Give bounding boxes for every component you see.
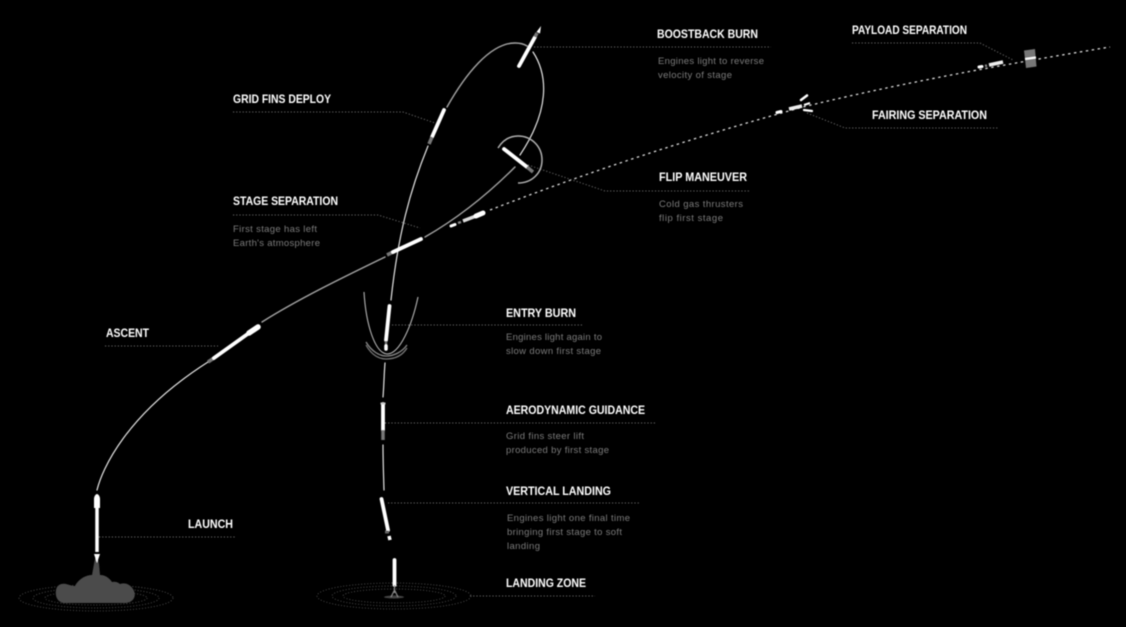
label: entry burn [506, 306, 602, 357]
label: payload separation: PAYLOAD SEPARATION [852, 23, 967, 37]
rocket: boostback burn [519, 26, 541, 66]
label: aerodynamic guidance: Grid fins steer lift [506, 431, 584, 442]
leader lines [99, 43, 1013, 596]
return arc [520, 52, 544, 155]
label: launch: LAUNCH [188, 517, 233, 531]
label: entry burn: ENTRY BURN [506, 306, 576, 320]
label: vertical landing [506, 484, 630, 552]
rocket: flip maneuver [504, 149, 533, 172]
label: aerodynamic guidance: AERODYNAMIC GUIDANCE [506, 403, 645, 417]
flip maneuver arc [498, 136, 542, 183]
coast descent arc [391, 146, 428, 300]
ascent trajectory [97, 362, 208, 490]
label: stage separation: First stage has left [233, 224, 317, 235]
label: entry burn: Engines light again to [506, 332, 602, 343]
satellite payload [1024, 49, 1036, 68]
rocket: launch [94, 494, 100, 563]
label: flip maneuver: Cold gas thrusters [659, 199, 743, 210]
label: stage separation: STAGE SEPARATION [233, 194, 338, 208]
launch pad rings [19, 585, 173, 611]
label: vertical landing: bringing first stage to soft [507, 527, 622, 538]
descent line to landing burn [383, 445, 384, 490]
label: stage separation [233, 194, 338, 249]
rocket: vertical landing [382, 499, 390, 540]
label: grid fins deploy: GRID FINS DEPLOY [233, 92, 331, 106]
label: entry burn: slow down first stage [506, 346, 601, 357]
rocket: stage separation [387, 239, 421, 255]
boostback arc [447, 43, 527, 107]
label: boostback burn: BOOSTBACK BURN [657, 27, 758, 41]
label: boostback burn: Engines light to reverse [658, 56, 764, 67]
rocket: fairing separation [777, 96, 812, 112]
label: boostback burn: velocity of stage [658, 70, 732, 81]
label: flip maneuver [659, 170, 747, 224]
label: flip maneuver: FLIP MANEUVER [659, 170, 747, 184]
rocket: upper stage at payload separation [979, 62, 1003, 67]
exhaust cloud [56, 556, 135, 603]
label: flip maneuver: flip first stage [659, 213, 723, 224]
label: boostback burn [657, 27, 764, 81]
label: vertical landing: landing [507, 541, 540, 552]
label: aerodynamic guidance [506, 403, 645, 456]
descent line to guidance [383, 363, 385, 397]
ascent trajectory upper [262, 257, 385, 322]
rocket: aerodynamic guidance [380, 404, 386, 440]
label: landing zone: LANDING ZONE [506, 576, 586, 590]
rocket: grid fins deploy [429, 110, 444, 144]
rocket: entry burn [386, 306, 390, 349]
label: ascent: ASCENT [106, 326, 150, 340]
label: vertical landing: Engines light one final time [507, 513, 630, 524]
entry burn shockwave [364, 292, 418, 359]
rocket: second stage [451, 213, 483, 226]
label: vertical landing: VERTICAL LANDING [506, 484, 611, 498]
rocket: landing zone [391, 560, 398, 597]
rocket: ascent [208, 327, 258, 362]
label: stage separation: Earth's atmosphere [233, 238, 320, 249]
landing zone rings [317, 583, 471, 609]
second stage dotted trajectory [490, 47, 1110, 210]
second stage arc to flip [425, 167, 515, 237]
label: fairing separation: FAIRING SEPARATION [872, 108, 987, 122]
label: aerodynamic guidance: produced by first stage [506, 445, 609, 456]
